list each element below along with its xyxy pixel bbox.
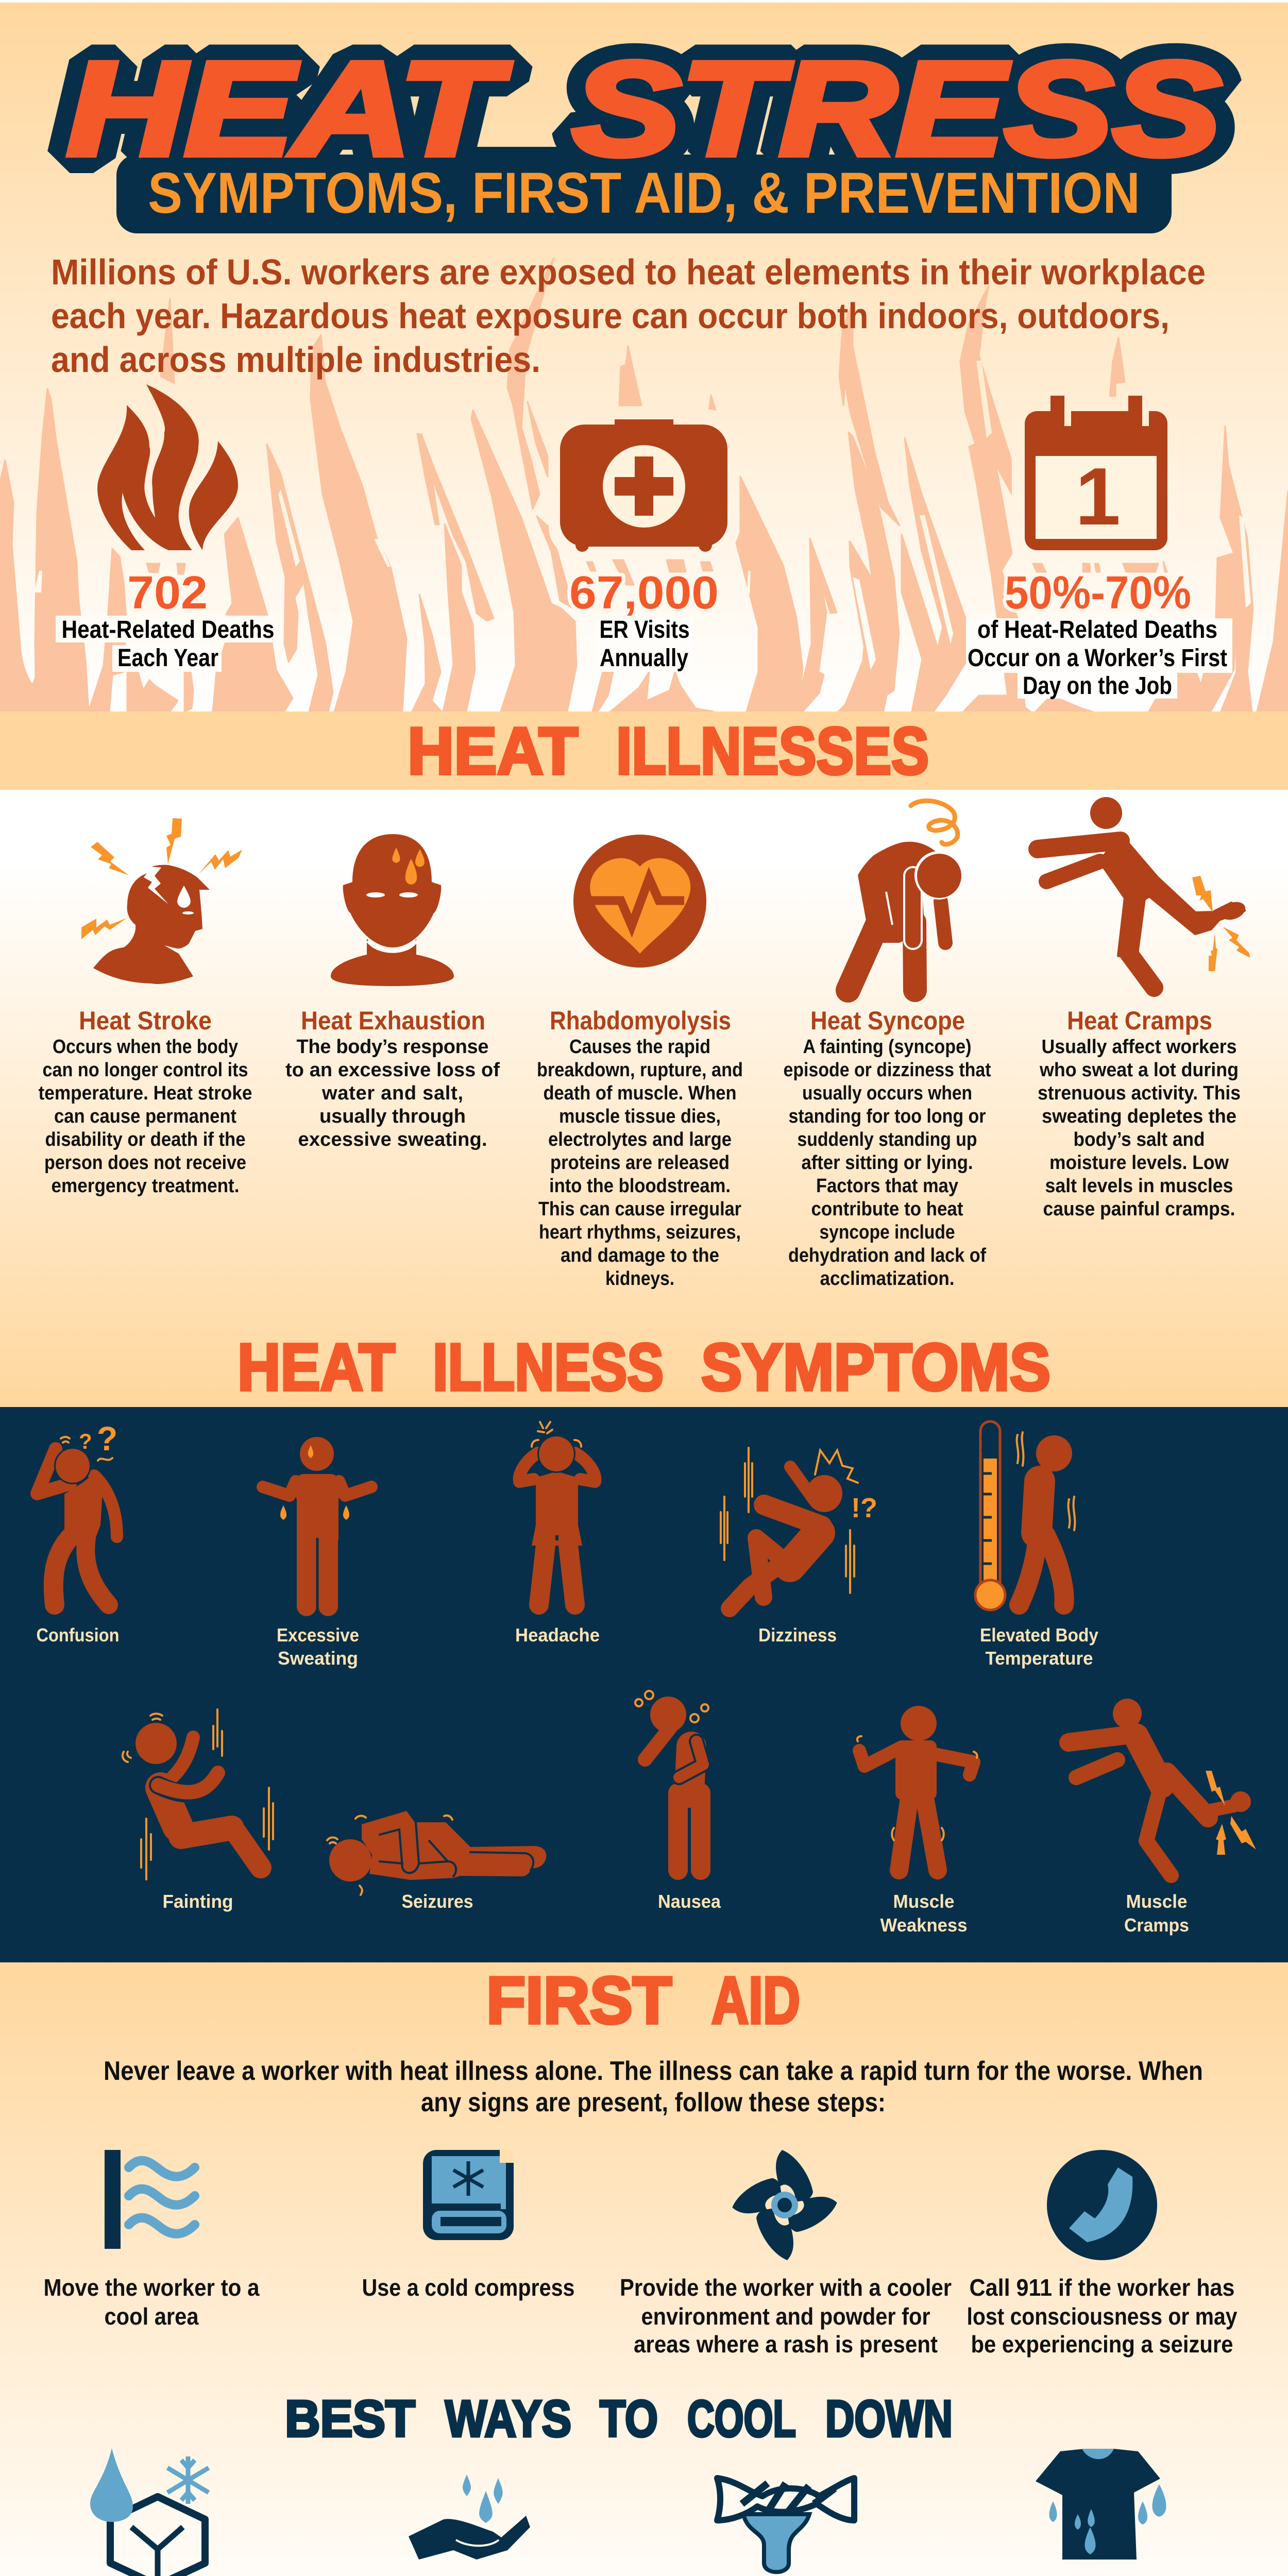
cool down: wet cloths	[694, 2478, 877, 2576]
figure: falling person: !?	[851, 1493, 877, 1523]
panel: symptom dizziness: Dizziness	[758, 1624, 837, 1646]
step: cold compress: Use a cold compress	[362, 2274, 575, 2301]
panel: heat cramps: body’s salt and	[1074, 1129, 1205, 1150]
figure: weak person	[857, 1706, 977, 1870]
icon: phone	[1047, 2150, 1157, 2260]
step: cooler environment: areas where a rash is present	[634, 2331, 938, 2358]
panel: symptom nausea: Nausea	[658, 1891, 721, 1912]
panel: rhabdomyolysis: electrolytes and large	[548, 1129, 732, 1150]
panel: heat syncope: dehydration and lack of	[788, 1245, 986, 1266]
panel: rhabdomyolysis: heart rhythms, seizures,	[539, 1222, 741, 1243]
panel: heat cramps	[1038, 797, 1250, 1220]
intro paragraph: Millions of U.S. workers are exposed to heat elements in their workplace	[51, 252, 1206, 292]
panel: heat syncope: acclimatization.	[820, 1268, 954, 1290]
step: call 911	[967, 2150, 1238, 2358]
panel: heat exhaustion: The body’s response	[297, 1036, 488, 1058]
intro paragraph	[51, 252, 1206, 380]
heading: heat illness symptoms: SYMPTOMS	[701, 1330, 1050, 1404]
step: move to cool area	[43, 2150, 260, 2330]
icon: wet shirt	[1036, 2449, 1166, 2560]
title	[67, 34, 1222, 233]
step: cooler environment	[620, 2150, 952, 2358]
panel: symptom fainting: Fainting	[163, 1891, 233, 1912]
panel: heat syncope: contribute to heat	[811, 1198, 963, 1220]
step: cooler environment: environment and powder for	[641, 2303, 930, 2330]
panel: heat cramps: Heat Cramps	[1067, 1006, 1212, 1035]
panel: symptom elevated body temperature	[975, 1421, 1098, 1669]
panel: heat cramps: salt levels in muscles	[1045, 1175, 1233, 1197]
intro paragraph: each year. Hazardous heat exposure can occur both indoors, outdoors,	[51, 296, 1170, 336]
panel: heat cramps: strenuous activity. This	[1038, 1082, 1241, 1104]
stat: ER visits	[549, 410, 739, 672]
panel: symptom excessive sweating: Sweating	[278, 1648, 358, 1669]
panel: symptom dizziness	[721, 1448, 877, 1646]
panel: rhabdomyolysis: into the bloodstream.	[549, 1175, 731, 1197]
heading: best ways to cool down: WAYS	[445, 2390, 571, 2448]
icon: sweating head	[331, 834, 454, 986]
background flames	[0, 258, 1288, 711]
stat: first day: of Heat-Related Deaths	[977, 616, 1217, 643]
cool down: soak clothing	[1023, 2449, 1181, 2576]
panel: heat syncope: after sitting or lying.	[802, 1152, 973, 1174]
panel: symptom seizures	[327, 1811, 546, 1912]
title: HEAT	[67, 34, 511, 183]
panel: symptom excessive sweating	[263, 1437, 371, 1669]
heading: best ways to cool down: DOWN	[825, 2390, 953, 2448]
figure: person lying down	[327, 1811, 546, 1895]
step: call 911: be experiencing a seizure	[971, 2331, 1233, 2358]
stat: deaths per year: 702	[127, 567, 208, 619]
step: move to cool area: cool area	[104, 2303, 199, 2330]
heading: heat illness symptoms: HEAT	[238, 1330, 395, 1404]
icon: figure with cramping leg	[1038, 797, 1250, 988]
step: cold compress	[362, 2150, 575, 2301]
heading: first aid	[486, 1963, 800, 2038]
panel: rhabdomyolysis: kidneys.	[605, 1268, 674, 1290]
panel: rhabdomyolysis: muscle tissue dies,	[559, 1106, 721, 1127]
panel: heat stroke: Heat Stroke	[79, 1006, 212, 1035]
panel: heat cramps: sweating depletes the	[1042, 1106, 1236, 1127]
icon: heart with pulse	[573, 835, 706, 968]
figure: falling person	[721, 1448, 877, 1608]
title: STRESS	[572, 34, 1222, 183]
step: call 911: lost consciousness or may	[967, 2303, 1238, 2330]
icon: cool air waves	[105, 2150, 195, 2249]
panel: symptom fainting	[123, 1709, 273, 1912]
panel: heat exhaustion: to an excessive loss of	[285, 1059, 500, 1081]
panel: heat stroke: temperature. Heat stroke	[38, 1082, 252, 1104]
heading: best ways to cool down: BEST	[285, 2390, 415, 2448]
stat: deaths per year: Each Year	[117, 645, 218, 672]
stat: deaths per year: Heat-Related Deaths	[62, 616, 274, 643]
heading: heat illness symptoms	[238, 1330, 1050, 1404]
panel: symptom headache	[515, 1422, 600, 1646]
panel: rhabdomyolysis: Causes the rapid	[569, 1036, 710, 1058]
panel: rhabdomyolysis: Rhabdomyolysis	[550, 1006, 731, 1035]
icon: first aid kit	[549, 410, 739, 558]
panel: heat stroke: Occurs when the body	[53, 1036, 238, 1058]
panel: heat stroke: can cause permanent	[54, 1106, 236, 1127]
panel: heat stroke	[38, 818, 252, 1197]
stat: first day	[966, 396, 1232, 700]
step: move to cool area: Move the worker to a	[43, 2274, 260, 2301]
background flames: slits	[34, 361, 1251, 670]
panel: heat syncope: Heat Syncope	[810, 1006, 965, 1035]
panel: symptom confusion	[36, 1419, 120, 1646]
panel: symptom muscle weakness	[857, 1706, 977, 1936]
intro paragraph: and across multiple industries.	[51, 340, 540, 380]
panel: rhabdomyolysis: breakdown, rupture, and	[537, 1059, 743, 1081]
panel: symptom muscle cramps	[1069, 1699, 1256, 1936]
panel: heat stroke: disability or death if the	[45, 1129, 245, 1150]
panel: heat syncope: episode or dizziness that	[783, 1059, 991, 1081]
panel: heat stroke: person does not receive	[44, 1152, 246, 1174]
panel: symptom muscle cramps: Muscle	[1126, 1891, 1187, 1912]
figure: collapsing person	[123, 1709, 273, 1879]
icon: calendar: 1	[1075, 451, 1121, 542]
heading: first aid: AID	[711, 1963, 800, 2038]
title: HEAT	[67, 34, 511, 183]
icon: calendar	[1012, 396, 1180, 561]
panel: heat syncope: standing for too long or	[788, 1106, 986, 1127]
icon: drop, ice cube, snowflake	[90, 2448, 209, 2576]
step: call 911: Call 911 if the worker has	[970, 2274, 1234, 2301]
panel: heat cramps: Usually affect workers	[1042, 1036, 1236, 1058]
panel: symptom elevated body temperature: Temperature	[985, 1648, 1093, 1669]
icon: wrung towel	[717, 2478, 854, 2572]
panel: heat syncope: A fainting (syncope)	[803, 1036, 972, 1058]
heading: best ways to cool down: COOL	[687, 2390, 796, 2448]
stat: deaths per year	[56, 384, 275, 672]
icon: hand with drops	[409, 2475, 530, 2560]
panel: heat syncope: usually occurs when	[802, 1082, 972, 1104]
first aid intro: any signs are present, follow these steps:	[421, 2088, 886, 2117]
panel: heat stroke: emergency treatment.	[52, 1175, 239, 1197]
panel: heat cramps: who sweat a lot during	[1039, 1059, 1239, 1081]
panel: rhabdomyolysis: death of muscle. When	[543, 1082, 737, 1104]
stat: first day: Day on the Job	[1023, 672, 1172, 700]
panel: heat cramps: cause painful cramps.	[1043, 1198, 1235, 1220]
panel: heat syncope	[783, 801, 991, 1290]
figure: thermometer and person	[975, 1421, 1075, 1610]
subtitle pill	[116, 155, 1172, 233]
figure: confused person: ?	[79, 1429, 92, 1453]
panel: symptom muscle cramps: Cramps	[1124, 1914, 1189, 1936]
heading band: heat illnesses: HEAT	[408, 714, 578, 788]
heading: heat illness symptoms: ILLNESS	[433, 1330, 664, 1404]
panel: rhabdomyolysis	[537, 835, 743, 1290]
figure: person holding head	[519, 1422, 595, 1605]
panel: rhabdomyolysis: and damage to the	[561, 1245, 719, 1266]
figure: sweating person	[263, 1437, 371, 1610]
panel: symptom confusion: Confusion	[36, 1624, 120, 1646]
title: SYMPTOMS, FIRST AID, & PREVENTION	[148, 161, 1140, 225]
icon: fan	[732, 2150, 837, 2260]
panel: heat exhaustion: water and salt,	[321, 1082, 463, 1104]
panel: heat stroke: can no longer control its	[42, 1059, 248, 1081]
panel: heat syncope: suddenly standing up	[798, 1129, 977, 1150]
panel: symptom muscle weakness: Weakness	[880, 1914, 968, 1936]
stat: ER visits: Annually	[600, 645, 688, 672]
heading band: heat illnesses	[0, 711, 1288, 790]
panel: heat exhaustion: usually through	[319, 1106, 466, 1127]
panel: heat cramps: moisture levels. Low	[1049, 1152, 1229, 1174]
icon: flame	[97, 384, 238, 550]
stat: ER visits: ER Visits	[600, 616, 689, 643]
title: STRESS	[572, 34, 1222, 183]
stat: first day: Occur on a Worker’s First	[968, 645, 1227, 672]
cool down: wet the skin	[404, 2475, 533, 2576]
panel: rhabdomyolysis: This can cause irregular	[538, 1198, 741, 1220]
panel: symptom headache: Headache	[515, 1624, 600, 1646]
figure: confused person	[37, 1419, 117, 1605]
heading: best ways to cool down: TO	[600, 2390, 658, 2448]
panel: symptom seizures: Seizures	[402, 1891, 473, 1912]
panel: heat exhaustion: excessive sweating.	[298, 1129, 487, 1150]
panel: symptom nausea	[635, 1691, 721, 1912]
first aid intro	[104, 2056, 1203, 2117]
panel: symptom muscle weakness: Muscle	[893, 1891, 954, 1912]
stat: ER visits: 67,000	[569, 567, 719, 619]
panel: symptom excessive sweating: Excessive	[277, 1624, 359, 1646]
icon: head with lightning	[81, 818, 242, 984]
figure: cramping person	[1069, 1699, 1256, 1875]
panel: heat syncope: syncope include	[819, 1222, 955, 1243]
panel: symptom elevated body temperature: Elevated Body	[980, 1624, 1098, 1646]
panel: rhabdomyolysis: proteins are released	[550, 1152, 730, 1174]
heading: first aid: FIRST	[486, 1963, 672, 2038]
figure: queasy person	[635, 1691, 708, 1870]
panel: heat exhaustion: Heat Exhaustion	[301, 1006, 485, 1035]
icon: folded towel with snowflake	[423, 2150, 514, 2240]
icon: fainting bent figure	[848, 801, 963, 990]
step: cooler environment: Provide the worker with a cooler	[620, 2274, 952, 2301]
stat: first day: 50%-70%	[1005, 567, 1191, 619]
heading: best ways to cool down	[285, 2390, 953, 2448]
panel: heat syncope: Factors that may	[816, 1175, 958, 1197]
cool down: ice bath	[52, 2448, 251, 2576]
panel: heat exhaustion	[285, 834, 500, 1150]
heading band: heat illnesses: ILLNESSES	[616, 714, 929, 788]
figure: confused person: ?	[97, 1419, 117, 1458]
